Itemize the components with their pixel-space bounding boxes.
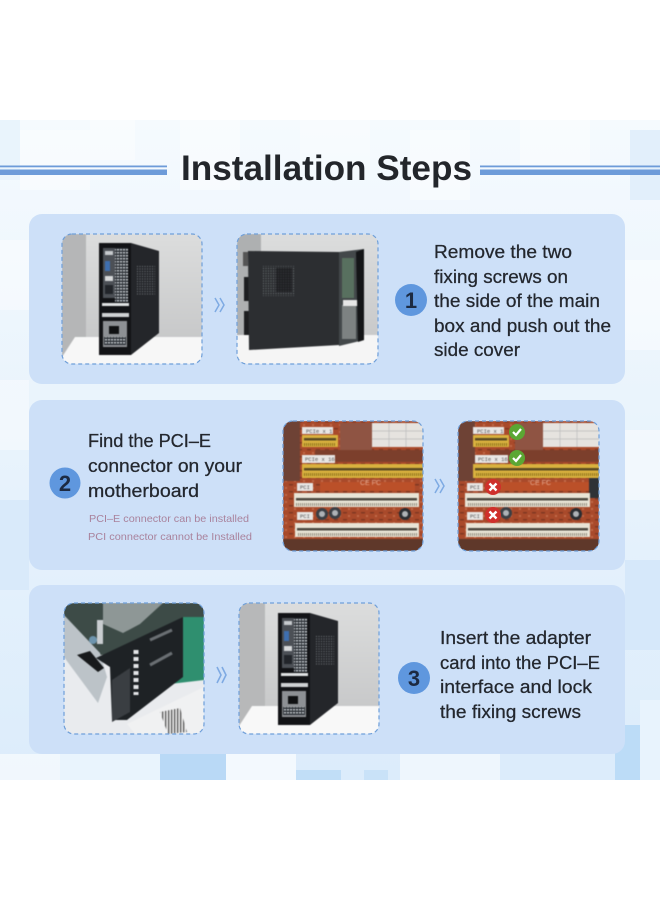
step number 2: 2 <box>59 471 71 496</box>
photo: motherboard with marks: PCI <box>470 484 480 491</box>
text: step 3: Insert the adapter <box>440 628 591 648</box>
photo: motherboard <box>283 421 423 551</box>
icon: check mark 2 <box>509 450 525 466</box>
arrow: step 1 <box>215 298 224 312</box>
text: step 2: PCI connector cannot be Installed <box>88 531 252 543</box>
icon: check mark 1 <box>509 424 525 440</box>
title <box>0 149 660 188</box>
text: step 3 <box>440 628 600 722</box>
photo: motherboard with marks: CE FC <box>530 480 551 487</box>
text: step 2: Find the PCI–E <box>88 431 211 451</box>
text: step 2 <box>88 431 252 543</box>
photo: motherboard: CE FC <box>360 480 381 487</box>
photo: motherboard: PCIe x 16 <box>305 456 335 463</box>
photo: motherboard with marks: PCIe x 16 <box>478 456 508 463</box>
text: step 3: the fixing screws <box>440 702 581 722</box>
photo: motherboard with marks: PCIe x 1 <box>477 428 504 435</box>
text: step 3: card into the PCI–E <box>440 653 600 673</box>
background mosaic <box>0 120 660 780</box>
text: step 2: PCI–E connector can be installed <box>89 513 249 525</box>
icon: cross mark 2 <box>485 507 501 523</box>
text: step 3: interface and lock <box>440 677 593 697</box>
step number 1: 1 <box>405 288 417 313</box>
title: Installation Steps <box>181 149 472 188</box>
text: step 2: motherboard <box>88 481 199 501</box>
text: step 1: box and push out the <box>434 316 611 336</box>
photo: motherboard with marks <box>458 421 599 551</box>
step number 3: 3 <box>408 666 420 691</box>
step number 2 <box>50 468 80 498</box>
text: step 1: fixing screws on <box>434 267 568 287</box>
text: step 1: the side of the main <box>434 291 600 311</box>
step number 3 <box>398 662 430 694</box>
photo: motherboard with marks: PCI <box>470 513 480 520</box>
panel: step 2 <box>29 400 625 570</box>
photo: tower reassembled <box>239 603 379 734</box>
arrow: step 3 <box>217 667 226 683</box>
photo: adapter card being inserted <box>64 603 204 734</box>
panel: step 1 <box>29 214 625 384</box>
text: step 1: Remove the two <box>434 242 572 262</box>
photo: motherboard: PCI <box>300 513 310 520</box>
step number 1 <box>395 284 427 316</box>
photo: motherboard: PCIe x 1 <box>306 428 333 435</box>
arrow: step 2 <box>435 479 444 493</box>
text: step 1 <box>434 242 611 360</box>
icon: cross mark 1 <box>485 479 501 495</box>
text: step 1: side cover <box>434 340 520 360</box>
photo: motherboard: PCI <box>300 484 310 491</box>
photo: tower with side cover <box>62 234 202 364</box>
photo: tower side cover removed <box>237 234 378 364</box>
panel: step 3 <box>29 585 625 754</box>
text: step 2: connector on your <box>88 456 242 476</box>
